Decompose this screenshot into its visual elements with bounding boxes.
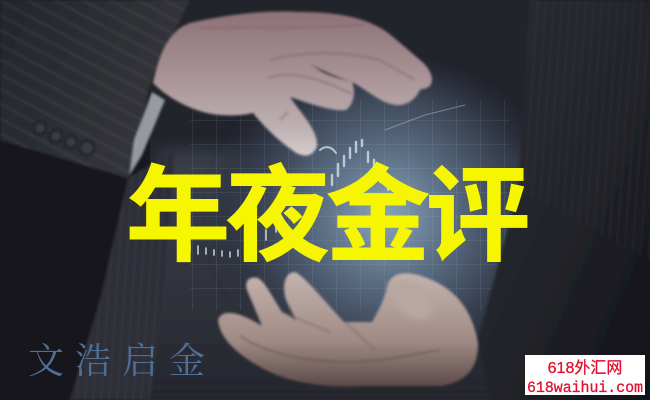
jacket buttons: [34, 122, 94, 155]
knuckle creases: [200, 24, 415, 120]
site name: 618外汇网: [548, 359, 622, 377]
watermark: author name: 文浩启金: [28, 341, 216, 381]
left suit sleeve: [0, 0, 190, 400]
upper hand: [129, 12, 432, 176]
title: 夜: [226, 159, 330, 275]
title: [126, 159, 530, 275]
stock chart line: [190, 105, 465, 257]
gap between fingers: [310, 64, 352, 82]
lower hand: [218, 272, 478, 386]
title: 金: [326, 159, 430, 275]
site URL: 618waihui.com: [527, 379, 643, 397]
shirt cuff: [129, 92, 165, 176]
site logo box: [525, 355, 645, 397]
right suit: [478, 0, 650, 400]
title: 评: [426, 159, 530, 275]
title: 年: [126, 159, 230, 275]
